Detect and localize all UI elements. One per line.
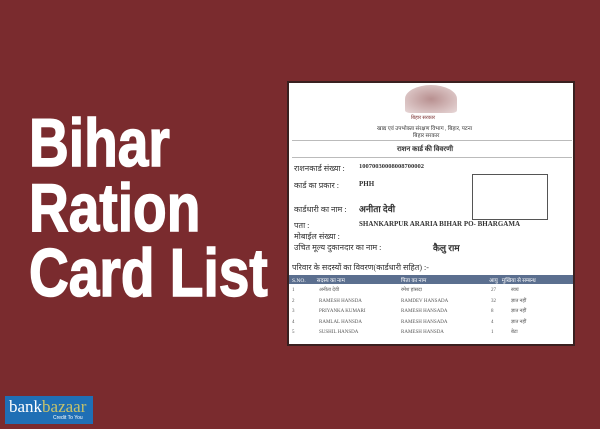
ration card image: कार्ड का प्रकार : xyxy=(294,181,339,190)
ration card image: RAMDEV HANSADA xyxy=(401,298,448,304)
ration card image: S.NO. सदस्य का नाम xyxy=(292,278,345,284)
icon: emblem xyxy=(405,85,457,113)
logo: bankbazaar: bankbazaar xyxy=(9,397,86,416)
title: Card List xyxy=(29,235,268,311)
ration card image: आयु मुखिया से सम्बन्ध xyxy=(489,278,536,284)
ration card image: RAMLAL HANSDA xyxy=(319,320,362,324)
ration card image: कैलु राम xyxy=(433,243,460,253)
ration card image: RAMESH HANSADA xyxy=(401,309,448,314)
ration card image: 1 xyxy=(491,330,494,335)
ration card image: राशन कार्ड की विवरणी xyxy=(397,145,453,153)
ration card image: 8 xyxy=(491,309,494,314)
ration card image: कार्डधारी का नाम : xyxy=(294,205,347,214)
ration card image: खाद्य एवं उपभोक्ता संरक्षण विभाग , बिहार, पटना xyxy=(377,126,472,132)
title: Ration xyxy=(29,170,200,246)
ration card image: RAMESH HANSDA xyxy=(319,298,362,304)
logo: bankbazaar: Credit To You xyxy=(53,415,83,421)
ration card image: पता : xyxy=(294,221,309,230)
ration card image: SUSHIL HANSDA xyxy=(319,330,358,335)
ration card image: बेटा xyxy=(511,330,518,335)
ration card image xyxy=(287,81,575,346)
ration card image: RAMESH HANSDA xyxy=(401,330,444,335)
ration card image: 5 xyxy=(292,330,294,335)
ration card image: परिवार के सदस्यों का विवरण(कार्डधारी सहित) :- xyxy=(292,263,429,272)
ration card image: 2 xyxy=(292,298,294,304)
ration card image: ज्ञात नहीं xyxy=(511,320,526,324)
ration card image: 4 xyxy=(491,320,494,324)
ration card image: PHH xyxy=(359,180,374,188)
ration card image: अनीता देवी xyxy=(359,204,395,214)
ration card image: 3 xyxy=(292,309,294,314)
ration card image: ज्ञात नहीं xyxy=(511,309,526,314)
table xyxy=(289,275,573,284)
ration card image: 10070030008008700002 xyxy=(359,163,424,170)
ration card image: 4 xyxy=(292,320,294,324)
ration card image: ज्ञात नहीं xyxy=(511,298,526,304)
title: Bihar xyxy=(29,105,170,181)
logo: bankbazaar xyxy=(5,396,93,424)
title xyxy=(29,105,268,311)
photo placeholder xyxy=(472,174,548,220)
ration card image: PRIYANKA KUMARI xyxy=(319,309,366,314)
ration card image: स्वयं xyxy=(511,288,519,293)
ration card image: पिता का नाम xyxy=(401,278,426,284)
ration card image: बिहार सरकार xyxy=(413,133,439,139)
ration card image: मोबाईल संख्या : xyxy=(294,232,340,241)
ration card image: उचित मूल्य दुकानदार का नाम : xyxy=(294,243,381,252)
ration card image: 32 xyxy=(491,298,496,304)
ration card image: अनीता देवी xyxy=(319,288,339,293)
ration card image: बिहार सरकार xyxy=(411,116,435,121)
ration card image: SHANKARPUR ARARIA BIHAR PO- BHARGAMA xyxy=(359,220,520,228)
ration card image: 1 xyxy=(292,288,294,293)
ration card image: रमेश हांसदा xyxy=(401,288,422,293)
ration card image: RAMESH HANSADA xyxy=(401,320,448,324)
ration card image: 27 xyxy=(491,288,496,293)
ration card image: राशनकार्ड संख्या : xyxy=(294,164,345,173)
